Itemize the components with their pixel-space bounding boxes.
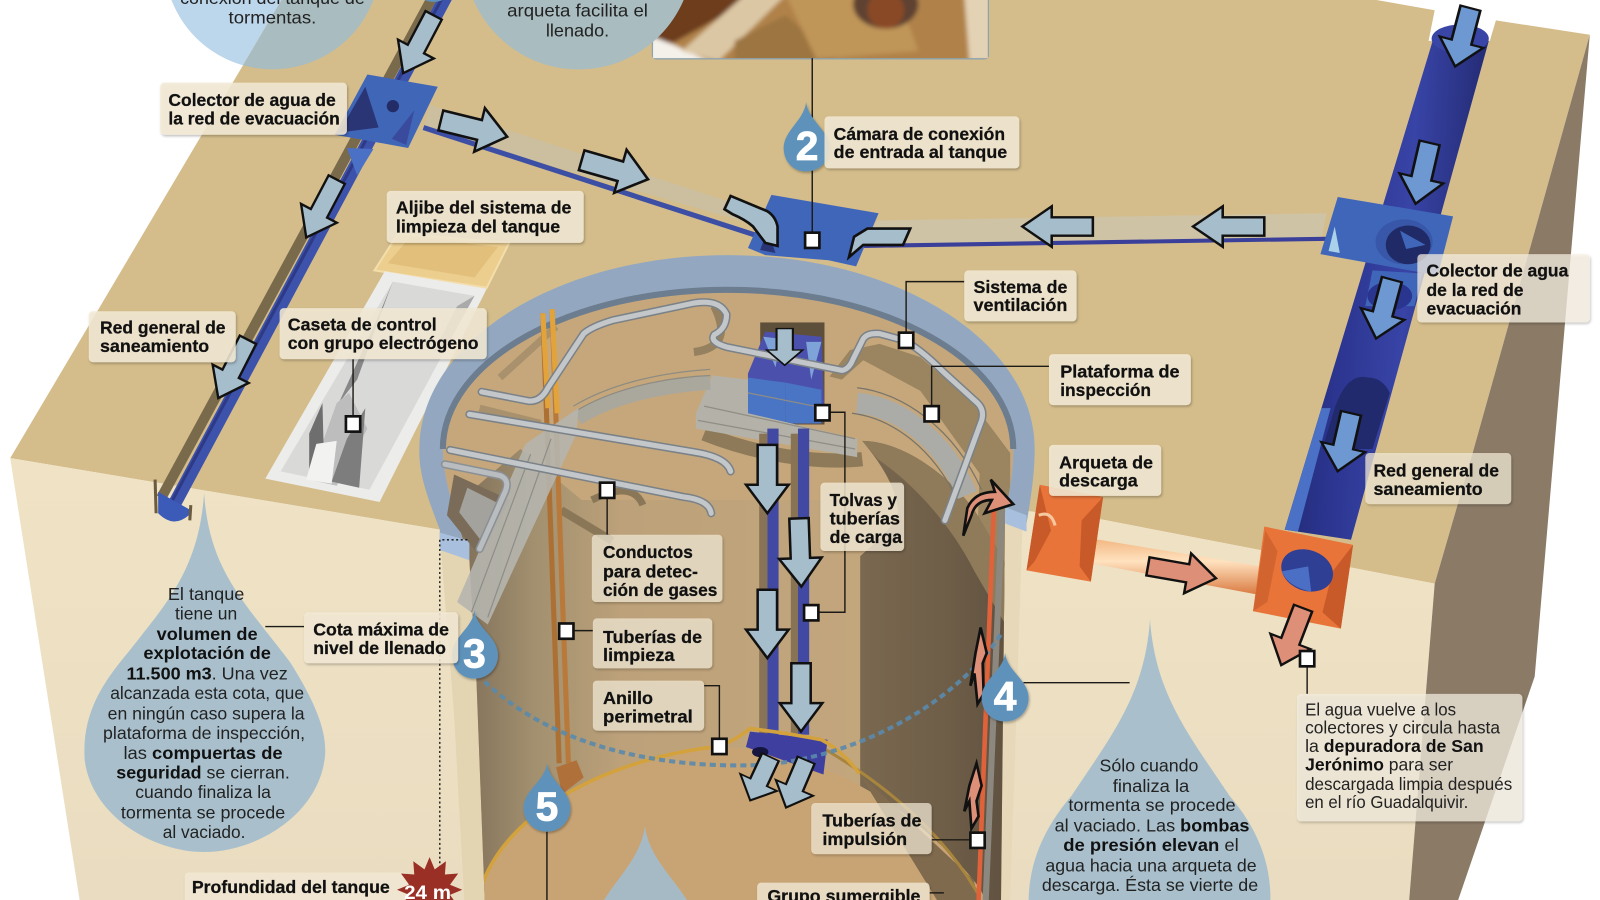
label: tuberias limpieza: Tuberías de	[603, 627, 702, 647]
label: conductos: Conductos	[603, 542, 693, 562]
tank interior	[439, 286, 1020, 900]
label: red general left: Red general de	[100, 318, 226, 338]
dashed water level line	[485, 633, 1002, 765]
big drop: emptying text: de presión elevan el	[1063, 835, 1239, 855]
text box: return to collectors: en el río Guadalquivir.	[1305, 792, 1468, 812]
text box: return to collectors: El agua vuelve a los	[1305, 699, 1456, 719]
big drop: emptying text: descarga. Ésta se vierte de	[1042, 875, 1258, 895]
badge: 24 m star	[397, 857, 462, 900]
label: cota	[304, 612, 458, 663]
label: aljibe: Aljibe del sistema de	[396, 197, 572, 217]
control building	[265, 271, 487, 502]
shadow beneath central platform	[704, 434, 862, 460]
big drop: bottom centre	[602, 827, 689, 900]
discharge chamber right	[1253, 527, 1353, 629]
label: cota: Cota máxima de	[313, 620, 449, 640]
big drop: volume text: explotación de	[143, 643, 271, 663]
central connection chamber	[748, 195, 879, 266]
label: conductos: para detec-	[603, 562, 698, 582]
label: colector left: Colector de agua de	[168, 90, 336, 110]
arrow: outflow 1	[732, 749, 789, 809]
label: caseta: Caseta de control	[288, 315, 437, 335]
arrow: right pipe 2	[1394, 138, 1451, 209]
callout: top centre drop with text: arqueta facilita el	[507, 0, 648, 20]
numbered drop 2: 2	[796, 123, 818, 169]
big drop: volume text: tiene un	[175, 603, 237, 623]
label: tolvas: Tolvas y	[830, 490, 897, 510]
callout: top centre drop with text: llenado.	[546, 21, 609, 41]
label: colector right: de la red de	[1427, 280, 1524, 300]
arrow: left pipe 2	[288, 170, 355, 247]
big drop: volume text	[84, 493, 325, 852]
panel: ground top surface	[10, 0, 1590, 584]
label: impulsion: impulsión	[822, 829, 907, 849]
numbered drop 4	[982, 653, 1029, 721]
central inspection platform	[696, 376, 857, 457]
vertical loading pipes	[759, 429, 809, 735]
big drop: volume text: en ningún caso supera la	[108, 703, 305, 723]
callout: top left drop with text	[181, 0, 374, 70]
numbered drop 3	[452, 610, 498, 679]
label: tolvas: tuberías	[830, 508, 900, 528]
arrow: loading 3	[746, 590, 789, 658]
silver conduits	[445, 302, 983, 549]
marker squares	[346, 233, 1314, 848]
label: anillo: perimetral	[603, 706, 693, 726]
panel: tank wall section left	[440, 536, 488, 900]
label: colector left: la red de evacuación	[168, 108, 340, 128]
label: ventilacion	[964, 270, 1077, 321]
numbered drop 2	[784, 102, 830, 171]
big drop: volume text: seguridad se cierran.	[116, 763, 290, 783]
big drop: emptying text	[1029, 619, 1270, 900]
arrow: right pipe 1	[1433, 2, 1492, 72]
label: cota: nivel de llenado	[313, 638, 446, 658]
shadow band under rim	[830, 344, 1010, 571]
arrow: band right 1	[1022, 206, 1093, 247]
band to chamber right	[862, 213, 1327, 246]
panel: top left circle underlay	[164, 0, 381, 69]
numbered drop 4: 4	[994, 673, 1017, 719]
label: anillo: Anillo	[603, 688, 653, 708]
big drop: volume text: 11.500 m3. Una vez	[127, 664, 288, 684]
big drop: emptying text: al vaciado. Las bombas	[1055, 816, 1249, 836]
left walkway	[457, 369, 710, 624]
label: arqueta: Arqueta de	[1059, 452, 1153, 472]
arrow: left pipe 1	[385, 6, 452, 83]
callout lines	[265, 58, 1307, 900]
label: arqueta: descarga	[1059, 471, 1138, 491]
big drop: emptying text: tormenta se procede	[1068, 795, 1236, 815]
numbered drop 5: 5	[536, 783, 558, 829]
big drop: emptying text: Sólo cuando	[1099, 755, 1198, 775]
label: conductos: ción de gases	[603, 580, 717, 600]
left sewer pipe	[155, 0, 447, 521]
text box: return to collectors: Jerónimo para ser	[1305, 754, 1453, 774]
label: camara	[824, 116, 1019, 168]
arrow: loading 1	[746, 445, 789, 513]
label: red general right	[1365, 453, 1511, 504]
arrow: red discharge pipe	[1144, 546, 1219, 598]
discharge riser	[979, 505, 1002, 900]
stair grate	[447, 474, 510, 556]
arrow: outflow 2	[767, 752, 825, 815]
arrow: right pipe 3	[1354, 274, 1414, 344]
arrow: red riser 1	[970, 628, 987, 704]
arrow: left pipe 3	[200, 331, 266, 407]
big drop: volume text: alcanzada esta cota, que	[110, 683, 304, 703]
arrow: band left 2	[575, 139, 654, 201]
arrow: right pipe 4	[1316, 408, 1373, 476]
flow arrows	[200, 2, 1492, 829]
label: caseta	[280, 308, 487, 359]
label: caseta: con grupo electrógeno	[288, 333, 479, 353]
label: red general left	[89, 311, 236, 362]
label: aljibe	[387, 191, 584, 243]
label: ventilacion: ventilación	[973, 295, 1067, 315]
perimeter sump	[712, 729, 859, 774]
arrow: red curved top	[963, 480, 1013, 536]
text box: return to collectors: descargada limpia después	[1305, 774, 1513, 794]
right collector box	[1320, 197, 1453, 310]
label: colector right: evacuación	[1427, 298, 1521, 318]
label: conductos	[592, 535, 722, 602]
dotted height line	[440, 540, 467, 888]
label: plataforma: inspección	[1060, 380, 1151, 400]
label: grupo sumergible	[757, 883, 930, 900]
text box: return to collectors	[1297, 694, 1522, 821]
label: colector left	[160, 83, 347, 135]
label: camara: Cámara de conexión	[834, 124, 1005, 144]
band to chamber left	[423, 105, 765, 237]
callout: top centre drop with text	[464, 0, 693, 69]
tank concrete rim	[419, 255, 1035, 560]
label: red general right: saneamiento	[1373, 479, 1483, 499]
label: plataforma	[1049, 354, 1191, 405]
top left collector box	[335, 74, 438, 176]
callout: top left drop with text: tormentas.	[229, 7, 316, 27]
text box: return to collectors: colectores y circula hasta	[1305, 718, 1500, 738]
label: plataforma: Plataforma de	[1060, 362, 1180, 382]
label: anillo	[593, 681, 704, 731]
arrow: band right 2	[1193, 206, 1264, 247]
peach discharge pipe	[1091, 539, 1261, 595]
big drop: volume text: El tanque	[168, 584, 244, 604]
big drop: volume text: volumen de	[157, 624, 258, 644]
arrow: loading 2	[778, 518, 823, 587]
panel: tank wall section right	[985, 515, 1022, 900]
arrow: loading 4	[780, 663, 822, 732]
small blue drop 1	[413, 0, 454, 2]
label: tuberias limpieza: limpieza	[603, 645, 675, 665]
right sewer pipe	[1285, 24, 1489, 540]
label: arqueta	[1049, 445, 1161, 496]
label: colector right	[1417, 254, 1590, 322]
aljibe cistern	[374, 234, 509, 288]
arrow: band left 1	[435, 99, 513, 159]
dark right wall	[860, 441, 1010, 900]
label: red general left: saneamiento	[100, 336, 209, 356]
big drop: emptying text: finaliza la	[1113, 776, 1190, 796]
label: tolvas	[820, 483, 904, 551]
big drop: volume text: tormenta se procede	[121, 802, 285, 822]
arrow: into hoppers	[767, 329, 803, 365]
label: impulsion: Tuberías de	[822, 811, 922, 831]
label: aljibe: limpieza del tanque	[396, 217, 561, 237]
label: impulsion	[811, 803, 932, 854]
discharge chamber left	[1027, 485, 1103, 582]
label: tuberias limpieza	[593, 618, 712, 668]
panel: ground front cut face	[10, 458, 1435, 900]
conduit shadows	[694, 306, 721, 352]
arrow: curved into chamber right	[849, 229, 910, 257]
label: profundidad	[185, 872, 408, 900]
numbered drop 5	[523, 763, 570, 832]
big drop: emptying text: agua hacia una arqueta de	[1045, 855, 1257, 875]
big drop: volume text: al vaciado.	[163, 822, 245, 842]
big drop: volume text: las compuertas de	[123, 743, 283, 763]
label: red general right: Red general de	[1373, 461, 1499, 481]
arrow: curved into chamber left	[724, 196, 778, 246]
big drop: volume text: cuando finaliza la	[135, 782, 271, 802]
hoppers recess and hoppers	[748, 322, 824, 424]
cleaning pipes	[543, 309, 584, 794]
right walkway	[852, 388, 982, 500]
label: camara: de entrada al tanque	[834, 142, 1008, 162]
panel: ground right side face	[1409, 35, 1590, 900]
numbered drop 3: 3	[463, 630, 486, 676]
label: colector right: Colector de agua	[1427, 261, 1569, 281]
label: profundidad: Profundidad del tanque	[192, 877, 390, 897]
floor	[474, 747, 990, 900]
label: tolvas: de carga	[830, 527, 902, 547]
big drop: volume text: plataforma de inspección,	[103, 723, 305, 743]
arrow: red exit	[1261, 601, 1323, 673]
photo: excavated tank	[652, 0, 989, 60]
text box: return to collectors: la depuradora de San	[1305, 736, 1484, 756]
arrow: red riser 2	[964, 763, 982, 829]
label: ventilacion: Sistema de	[973, 277, 1068, 297]
